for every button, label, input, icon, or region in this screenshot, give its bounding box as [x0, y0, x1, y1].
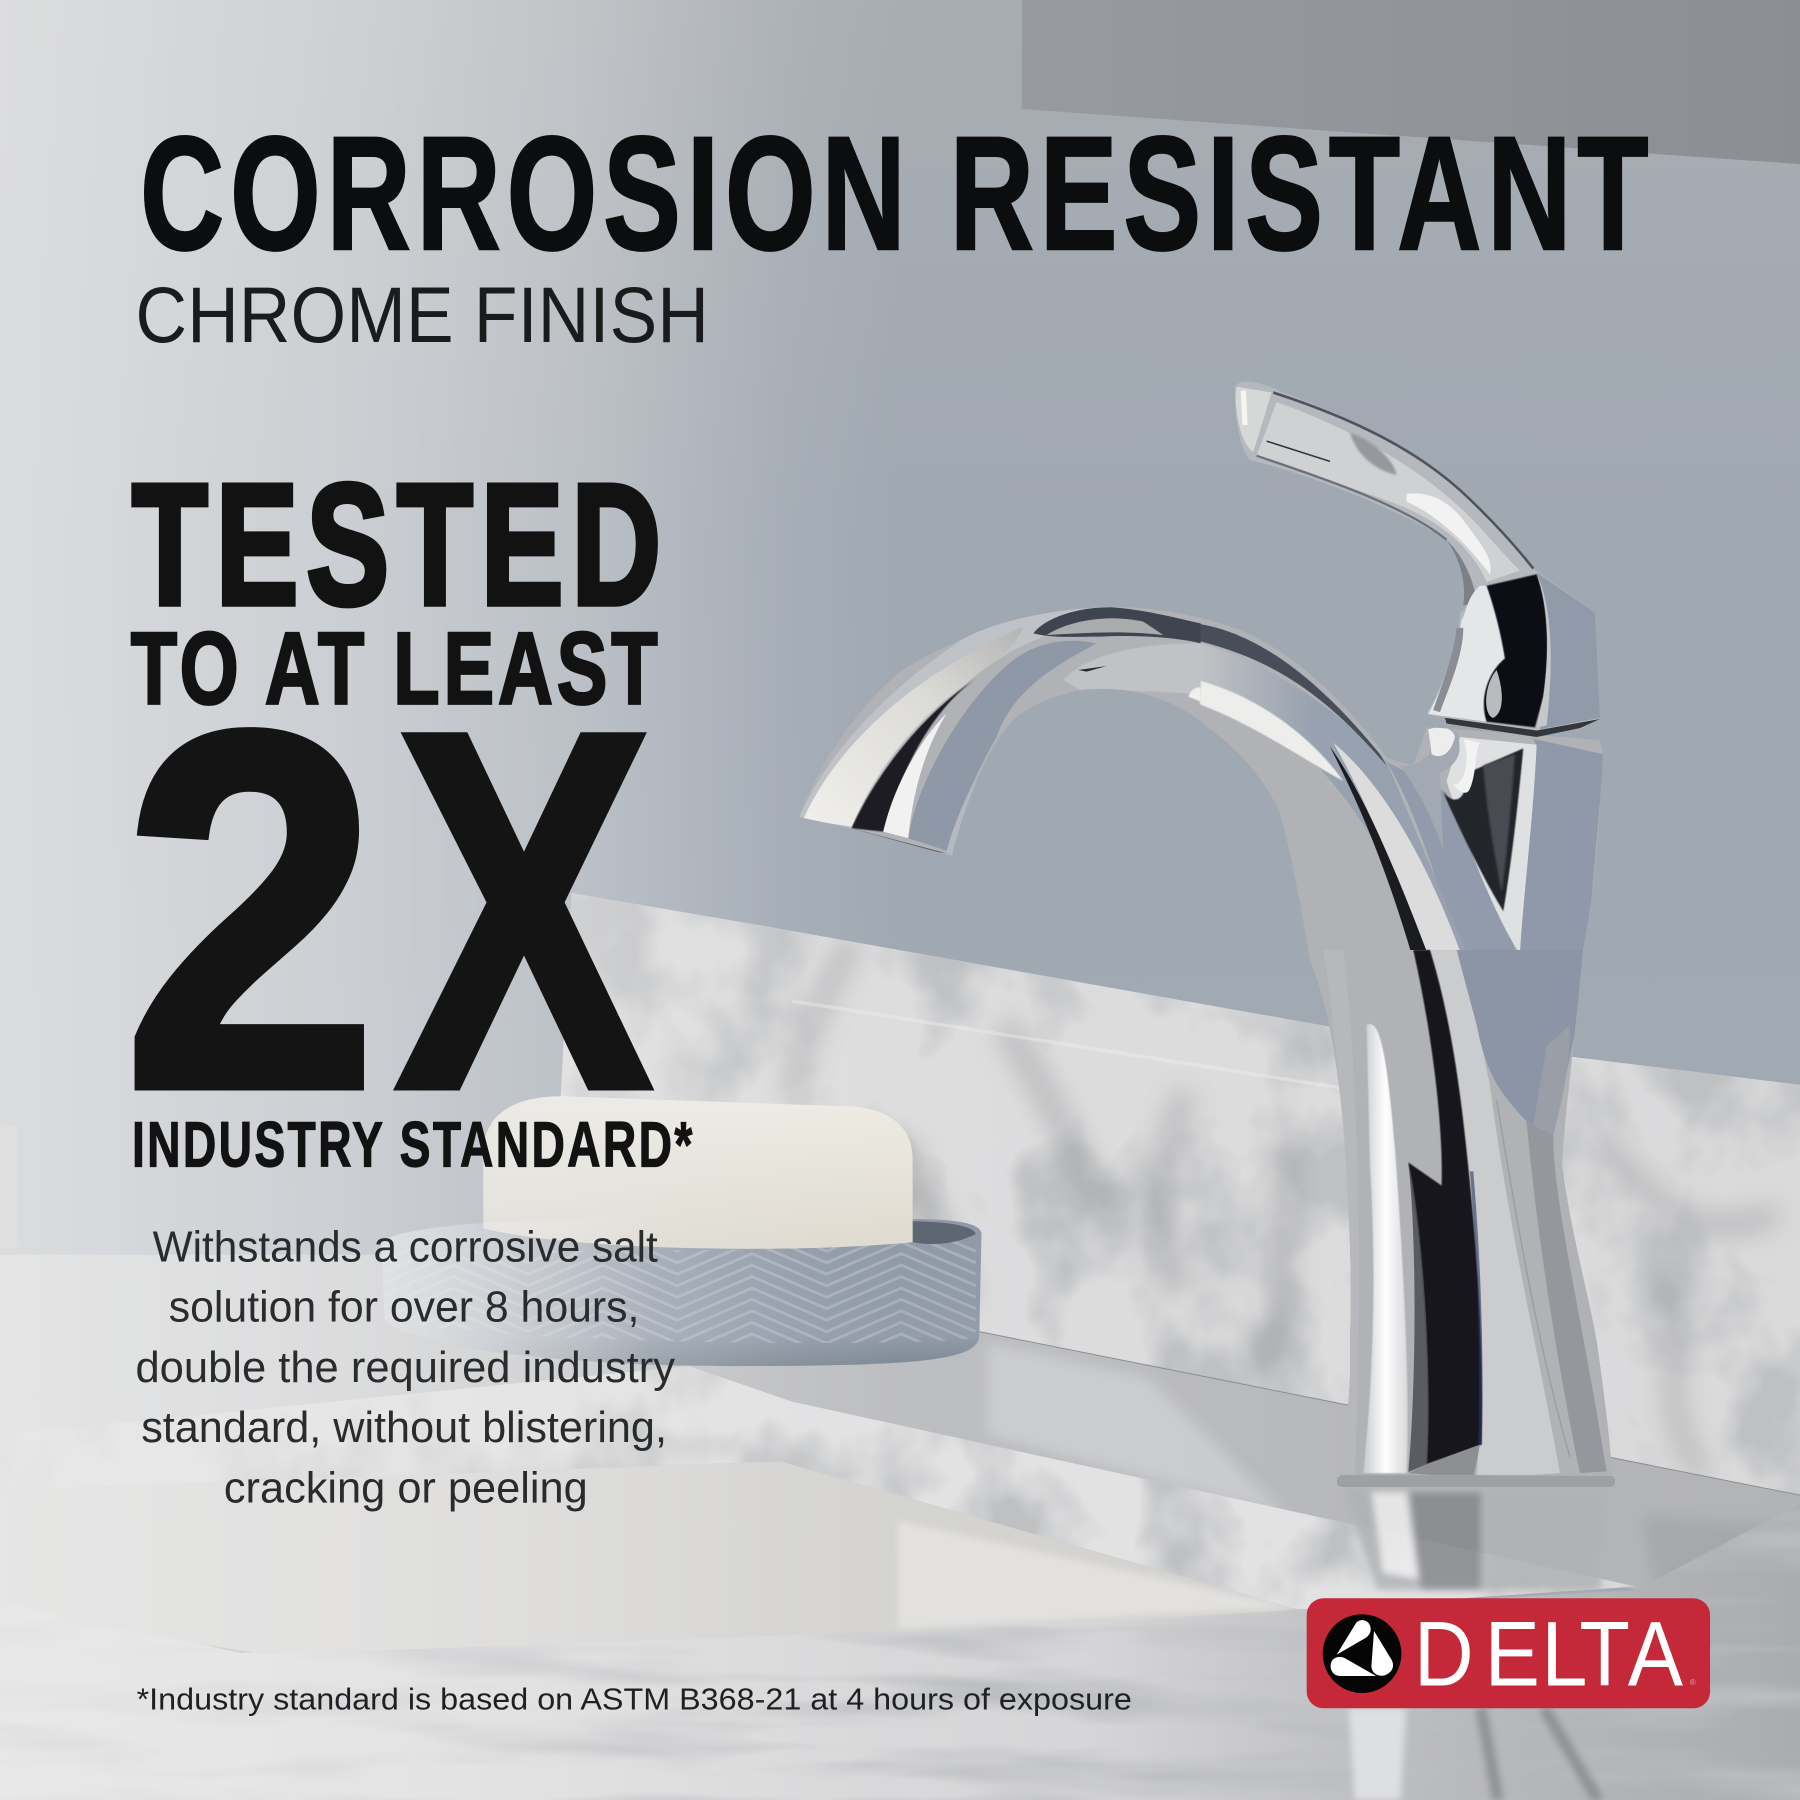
description text block [135, 1224, 675, 1513]
reflection of faucet in counter [1343, 1488, 1611, 1800]
faucet lever handle [1235, 381, 1600, 737]
description text block: solution for over 8 hours, [169, 1283, 639, 1331]
description text block: double the required industry [135, 1344, 675, 1392]
icon: delta triangle mark [1323, 1614, 1401, 1693]
claim: to at least: TO AT LEAST [131, 613, 658, 726]
claim: industry standard: INDUSTRY STANDARD* [132, 1108, 693, 1180]
footnote: *Industry standard is based on ASTM B368-21 at 4 hours of exposure [137, 1681, 1132, 1716]
description text block: cracking or peeling [224, 1465, 588, 1513]
registered mark: ® [1690, 1678, 1696, 1687]
logo: Delta [1307, 1598, 1710, 1708]
description text block: Withstands a corrosive salt [153, 1224, 658, 1272]
lower counter marble [0, 1528, 1800, 1800]
letter X: X [396, 628, 653, 1194]
numeral 2: 2 [123, 627, 378, 1194]
sink basin [0, 1461, 1297, 1654]
mirror at top right [1022, 0, 1800, 164]
lower column chrome details [1337, 949, 1611, 1476]
soap bar [483, 1096, 913, 1249]
faucet [790, 381, 1643, 1489]
arm and upper body chrome details [1200, 624, 1603, 972]
subtitle: chrome finish: CHROME FINISH [135, 271, 709, 359]
counter top surface behind ledge [0, 1255, 1800, 1590]
description text block: standard, without blistering, [141, 1404, 667, 1452]
title: corrosion resistant: CORROSION RESISTANT [140, 102, 1648, 284]
marble backsplash [551, 884, 1800, 1504]
small object at left edge [0, 1125, 17, 1249]
soft reflection on counter shelf [987, 1343, 1800, 1584]
logo red badge [1307, 1598, 1710, 1708]
triangular valve recess [1400, 726, 1537, 953]
soap dish [379, 1217, 982, 1366]
spout chrome details [799, 607, 1201, 856]
extra fade over left of dish [381, 1217, 982, 1366]
logo wordmark: DELTA [1414, 1603, 1684, 1706]
claim: 2X [123, 627, 653, 1194]
faucet base foot shadow [1337, 1476, 1615, 1487]
faucet spout and body [790, 600, 1643, 1489]
claim: tested: TESTED [132, 448, 661, 641]
marble front ledge of counter [0, 1366, 1642, 1613]
